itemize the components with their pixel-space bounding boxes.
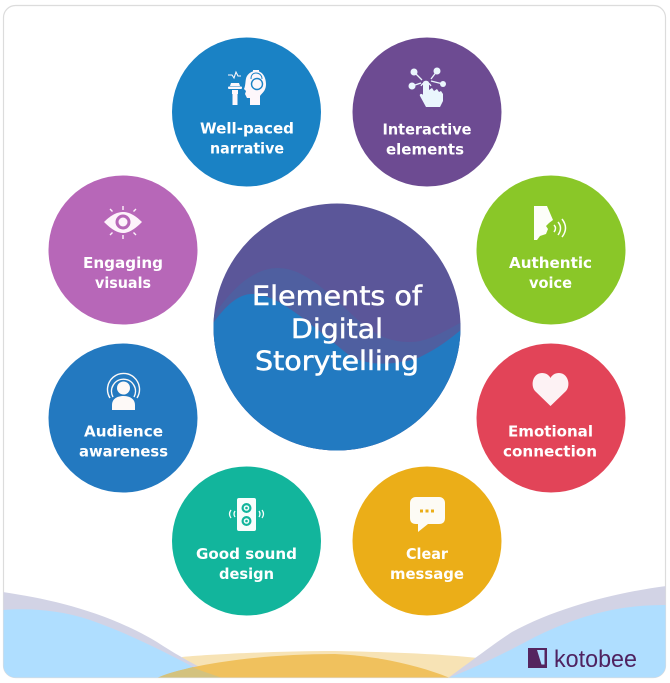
node: authentic voice: Authentic: [509, 254, 592, 272]
node: clear message: [352, 466, 502, 616]
center title: [252, 281, 423, 377]
node: engaging visuals: visuals: [95, 274, 151, 292]
node: well-paced narrative: Well-paced: [200, 120, 294, 138]
icon: person with signal: [108, 373, 140, 410]
node: clear message: message: [390, 565, 464, 583]
node: well-paced narrative: narrative: [210, 140, 284, 158]
bottom decorative waves: [3, 586, 666, 678]
node: authentic voice: [476, 176, 626, 324]
node: emotional connection: [476, 344, 626, 492]
node: well-paced narrative: [172, 38, 321, 186]
icon: heart: [533, 373, 568, 406]
node: engaging visuals: Engaging: [83, 254, 163, 272]
node: interactive elements: [352, 38, 502, 186]
node: audience awareness: awareness: [79, 442, 168, 460]
node: good sound design: design: [219, 565, 274, 583]
kotobee logo: kotobee: [554, 646, 637, 673]
node: audience awareness: [48, 344, 198, 492]
node: interactive elements: Interactive: [382, 120, 472, 138]
center title: Elements of: [252, 281, 423, 312]
node: good sound design: Good sound: [196, 545, 297, 563]
node: good sound design: [172, 466, 321, 616]
node: authentic voice: voice: [529, 274, 572, 292]
icon: eye: [104, 206, 142, 239]
node: emotional connection: connection: [503, 442, 597, 460]
icon: speech bubble: [410, 497, 445, 532]
icon: speaking head: [534, 206, 566, 240]
center title: Digital: [291, 314, 383, 345]
icon: speaker: [230, 498, 264, 531]
center title: Storytelling: [255, 346, 419, 377]
icon: microphone and headphones: [228, 70, 266, 105]
icon: touch hand with nodes: [408, 68, 446, 107]
node: audience awareness: Audience: [84, 422, 163, 440]
node: emotional connection: Emotional: [508, 422, 593, 440]
node: engaging visuals: [48, 176, 198, 324]
center circle: [214, 204, 460, 450]
node: clear message: Clear: [406, 545, 449, 563]
node: interactive elements: elements: [386, 140, 464, 158]
